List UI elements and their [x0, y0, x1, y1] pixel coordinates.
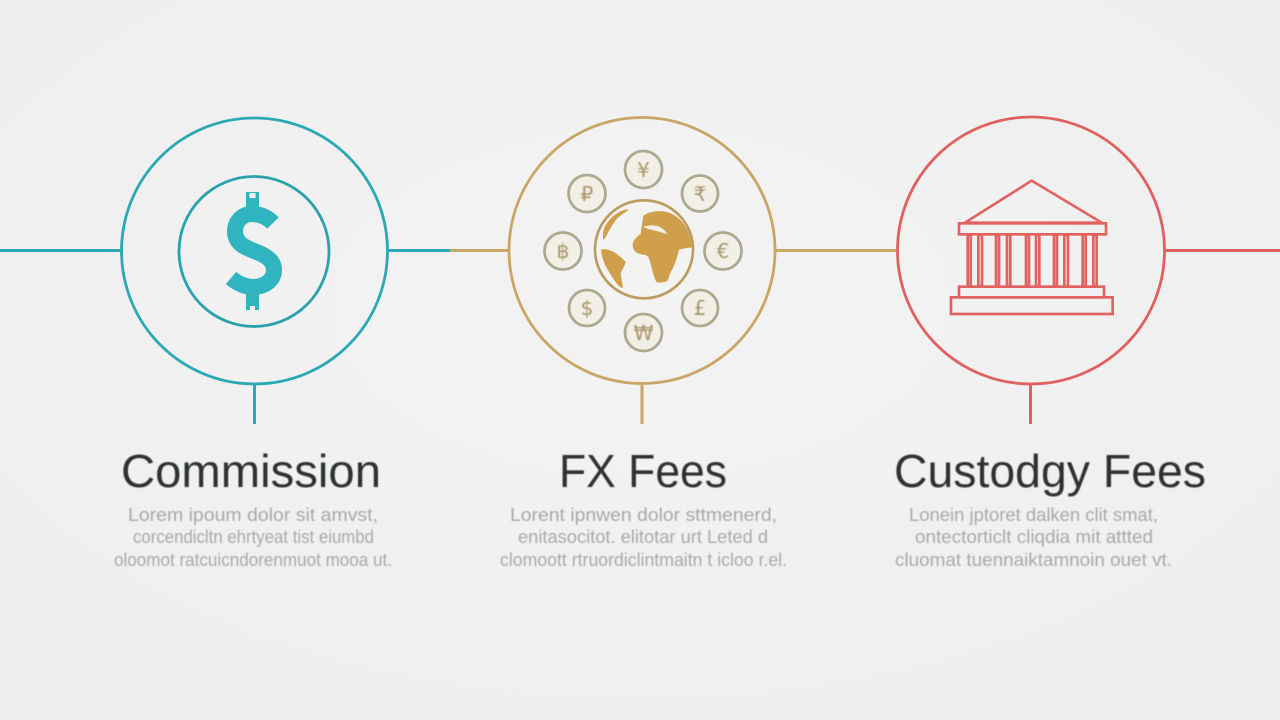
currency coins ring: ¥ [637, 158, 650, 182]
text block: custody fees description: ontectorticlt cliqdia mit attted [915, 527, 1153, 547]
currency coins ring: ฿ [557, 239, 569, 263]
text block: commission description [114, 505, 392, 570]
icon: dollar in concentric circles [122, 118, 388, 384]
text block: fx fees description [500, 505, 787, 570]
icon: globe [595, 200, 693, 298]
panel: fx fees [450, 118, 896, 570]
text block: commission description: Lorem ipoum dolor sit amvst, [128, 505, 378, 525]
heading: commission: Commission [121, 445, 381, 497]
currency coins ring: ₹ [694, 182, 706, 206]
infographic canvas [0, 116, 1280, 566]
outer ring: fx fees [509, 118, 775, 384]
currency coins ring: ₽ [581, 182, 594, 206]
outer ring: custody fees [898, 117, 1164, 384]
icon: bank building [951, 181, 1113, 314]
panel: custody fees [894, 117, 1280, 570]
text block: fx fees description: clomoott rtruordiclintmaitn t icloo r.el. [500, 550, 787, 570]
currency coins ring: £ [694, 296, 706, 320]
text block: fx fees description: Lorent ipnwen dolor sttmenerd, [510, 505, 777, 525]
currency coins ring: ₩ [634, 321, 654, 345]
text block: commission description: corcendicltn ehrtyeat tist eiumbd [133, 527, 374, 547]
heading: fx fees: FX Fees [559, 445, 727, 497]
text block: commission description: oloomot ratcuicndorenmuot mooa ut. [114, 550, 392, 570]
currency coins ring [544, 151, 742, 351]
text block: custody fees description: Lonein jptoret dalken clit smat, [909, 505, 1158, 525]
connector lines: custody fees [1030, 250, 1280, 424]
connector lines: commission [0, 250, 450, 424]
panel: commission [0, 118, 450, 570]
currency coins ring: € [717, 239, 729, 263]
currency coins ring: $ [581, 296, 593, 320]
text block: custody fees description [895, 505, 1172, 570]
text block: fx fees description: enitasocitot. elitotar urt Leted d [518, 527, 768, 547]
connector lines: fx fees [450, 250, 896, 424]
heading: custody fees: Custodgy Fees [894, 445, 1206, 497]
text block: custody fees description: cluomat tuennaiktamnoin ouet vt. [895, 550, 1172, 570]
